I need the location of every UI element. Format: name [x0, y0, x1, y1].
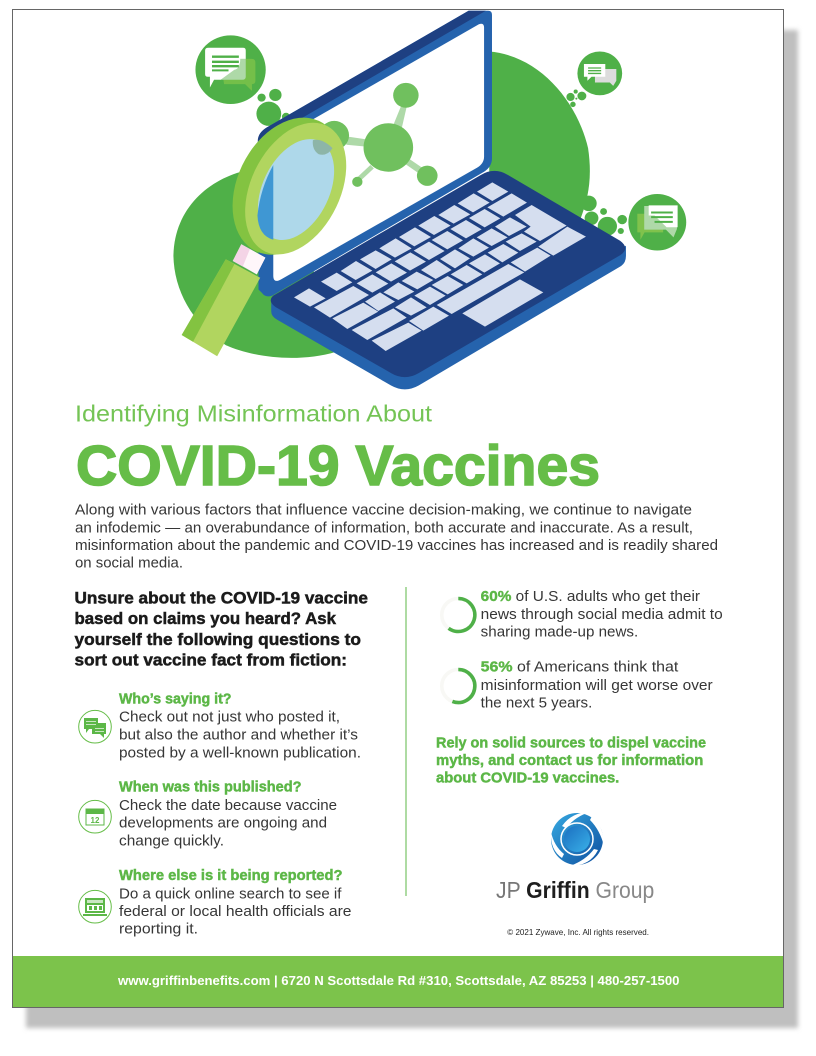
text block: Check the date because vaccine: [119, 797, 337, 814]
text block: When was this published?: [119, 780, 302, 796]
icon: calendar: 12: [91, 816, 100, 825]
chat bubble circle: top left: [195, 35, 266, 104]
intro paragraph: an infodemic — an overabundance of information, both accurate and inaccurate. As a result,: [75, 519, 693, 536]
call to action: [436, 736, 706, 786]
text block: Do a quick online search to see if: [119, 885, 342, 902]
footer band: [13, 956, 783, 1007]
text block: Check out not just who posted it,: [119, 709, 340, 726]
text block: [119, 868, 352, 938]
magnifying glass: [182, 100, 366, 356]
left column heading: sort out vaccine fact from fiction:: [74, 650, 347, 669]
keyboard row 3: [332, 205, 567, 329]
text: misinformation will get worse over: [481, 677, 713, 694]
left column heading: Unsure about the COVID-19 vaccine: [74, 588, 368, 607]
text: news through social media admit to: [481, 606, 723, 623]
donut: 60%: [442, 598, 475, 632]
text block: developments are ongoing and: [119, 815, 327, 832]
intro paragraph: on social media.: [75, 555, 183, 572]
laptop keyboard: [294, 182, 586, 351]
text: 60% of U.S. adults who get their: [481, 588, 700, 605]
left column heading: [74, 588, 368, 669]
trackpad: [462, 279, 543, 327]
keyboard row 4: [352, 233, 537, 340]
small decorative bubbles: [256, 89, 627, 236]
icon: chat bubbles: [79, 710, 111, 743]
stat: 60 percent: [442, 588, 723, 641]
question: who's saying it: [79, 691, 361, 762]
call to action: about COVID-19 vaccines.: [436, 770, 619, 786]
text block: Who’s saying it?: [119, 691, 232, 707]
text: 56% of Americans think that: [481, 659, 679, 676]
keyboard row 1: [294, 182, 508, 307]
text: the next 5 years.: [481, 694, 592, 711]
hero illustration: laptop, magnifier and chat bubbles: [173, 11, 686, 389]
keyboard row 2: [314, 193, 527, 318]
text: [481, 659, 713, 711]
stat: 56 percent: [442, 659, 713, 711]
intro paragraph: Along with various factors that influence vaccine decision-making, we continue to navigate: [75, 502, 692, 518]
text block: federal or local health officials are: [119, 903, 352, 920]
text block: Where else is it being reported?: [119, 868, 342, 884]
laptop base: [271, 171, 626, 389]
chat bubble circle: top right: [577, 52, 622, 95]
question: where else is it being reported: [79, 868, 351, 938]
left column heading: yourself the following questions to: [74, 630, 361, 649]
chat bubble circle: lower right: [628, 194, 686, 251]
laptop screen: [258, 11, 492, 296]
column divider: [406, 587, 407, 896]
text block: but also the author and whether it’s: [119, 726, 358, 744]
left column heading: based on claims you heard? Ask: [74, 609, 337, 628]
copyright: © 2021 Zywave, Inc. All rights reserved.: [507, 927, 649, 937]
text block: change quickly.: [119, 832, 224, 849]
icon: laptop browser: [79, 890, 111, 923]
text: [481, 588, 723, 641]
text block: [119, 780, 337, 849]
footer contact text: www.griffinbenefits.com | 6720 N Scottsdale Rd #310, Scottsdale, AZ 85253 | 480-257-1500: [117, 973, 679, 988]
call to action: myths, and contact us for information: [436, 753, 703, 769]
subtitle: Identifying Misinformation About: [75, 400, 432, 426]
title: COVID-19 Vaccines: [76, 434, 600, 498]
keyboard row 5 with space bar: [372, 227, 586, 351]
logo: swirl mark: [551, 812, 604, 866]
question: when was this published: [79, 780, 337, 849]
text block: posted by a well-known publication.: [119, 744, 361, 762]
icon: calendar: [79, 800, 111, 833]
intro paragraph: [75, 502, 718, 572]
text block: [119, 691, 361, 762]
logo: wordmark: JP Griffin Group: [496, 877, 654, 903]
text: sharing made-up news.: [481, 624, 638, 641]
call to action: Rely on solid sources to dispel vaccine: [436, 736, 706, 752]
donut: 56%: [442, 670, 475, 702]
text block: reporting it.: [119, 920, 198, 938]
intro paragraph: misinformation about the pandemic and COVID-19 vaccines has increased and is readily shared: [75, 537, 718, 554]
green background blobs: [173, 52, 590, 358]
molecule on screen: [319, 83, 438, 187]
